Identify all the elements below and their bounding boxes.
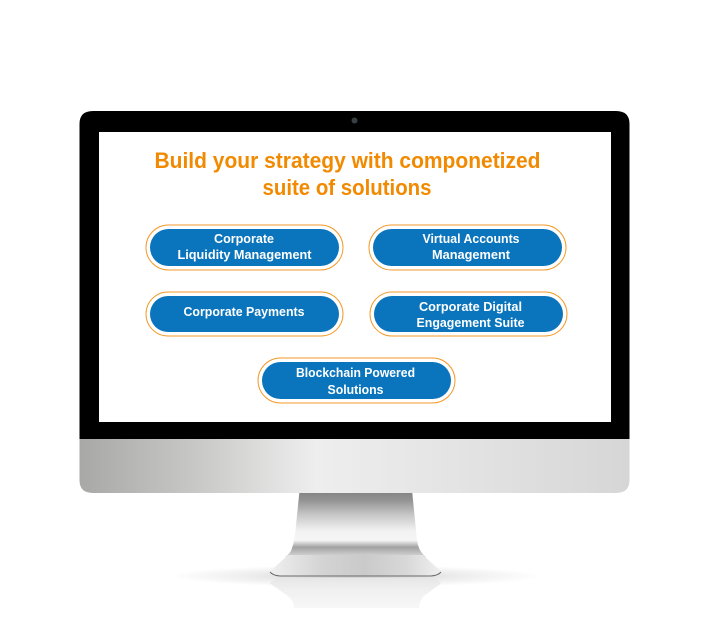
button: Virtual Accounts Management: Management: [432, 248, 511, 262]
title: Build your strategy with componetized: [154, 148, 540, 173]
stand reflection: [270, 578, 441, 608]
button: Corporate Liquidity Management: Corporate: [214, 232, 274, 246]
button: Corporate Liquidity Management: Liquidity Management: [178, 248, 312, 262]
button: Blockchain Powered Solutions: Blockchain Powered: [296, 366, 415, 380]
button: Blockchain Powered Solutions: [258, 358, 455, 403]
camera: [352, 118, 358, 124]
bezel: [80, 111, 630, 439]
button: Virtual Accounts Management: Virtual Accounts: [422, 232, 520, 246]
stand shadow: [170, 565, 540, 587]
chin: [80, 430, 630, 493]
button: Corporate Liquidity Management: [146, 225, 343, 270]
monitor: [80, 111, 630, 608]
stand neck: [285, 493, 426, 557]
button: Virtual Accounts Management: [369, 225, 566, 270]
button: Corporate Digital Engagement Suite: [370, 292, 567, 336]
button: Blockchain Powered Solutions: Solutions: [328, 383, 384, 397]
button: Corporate Payments: Corporate Payments: [184, 305, 305, 319]
button: Corporate Digital Engagement Suite: Engagement Suite: [416, 316, 525, 330]
title: [154, 148, 540, 200]
stand base: [270, 555, 441, 576]
title: suite of solutions: [262, 175, 432, 200]
button: Corporate Digital Engagement Suite: Corporate Digital: [419, 300, 522, 314]
screen: [99, 132, 611, 422]
button: Corporate Payments: [146, 292, 343, 336]
